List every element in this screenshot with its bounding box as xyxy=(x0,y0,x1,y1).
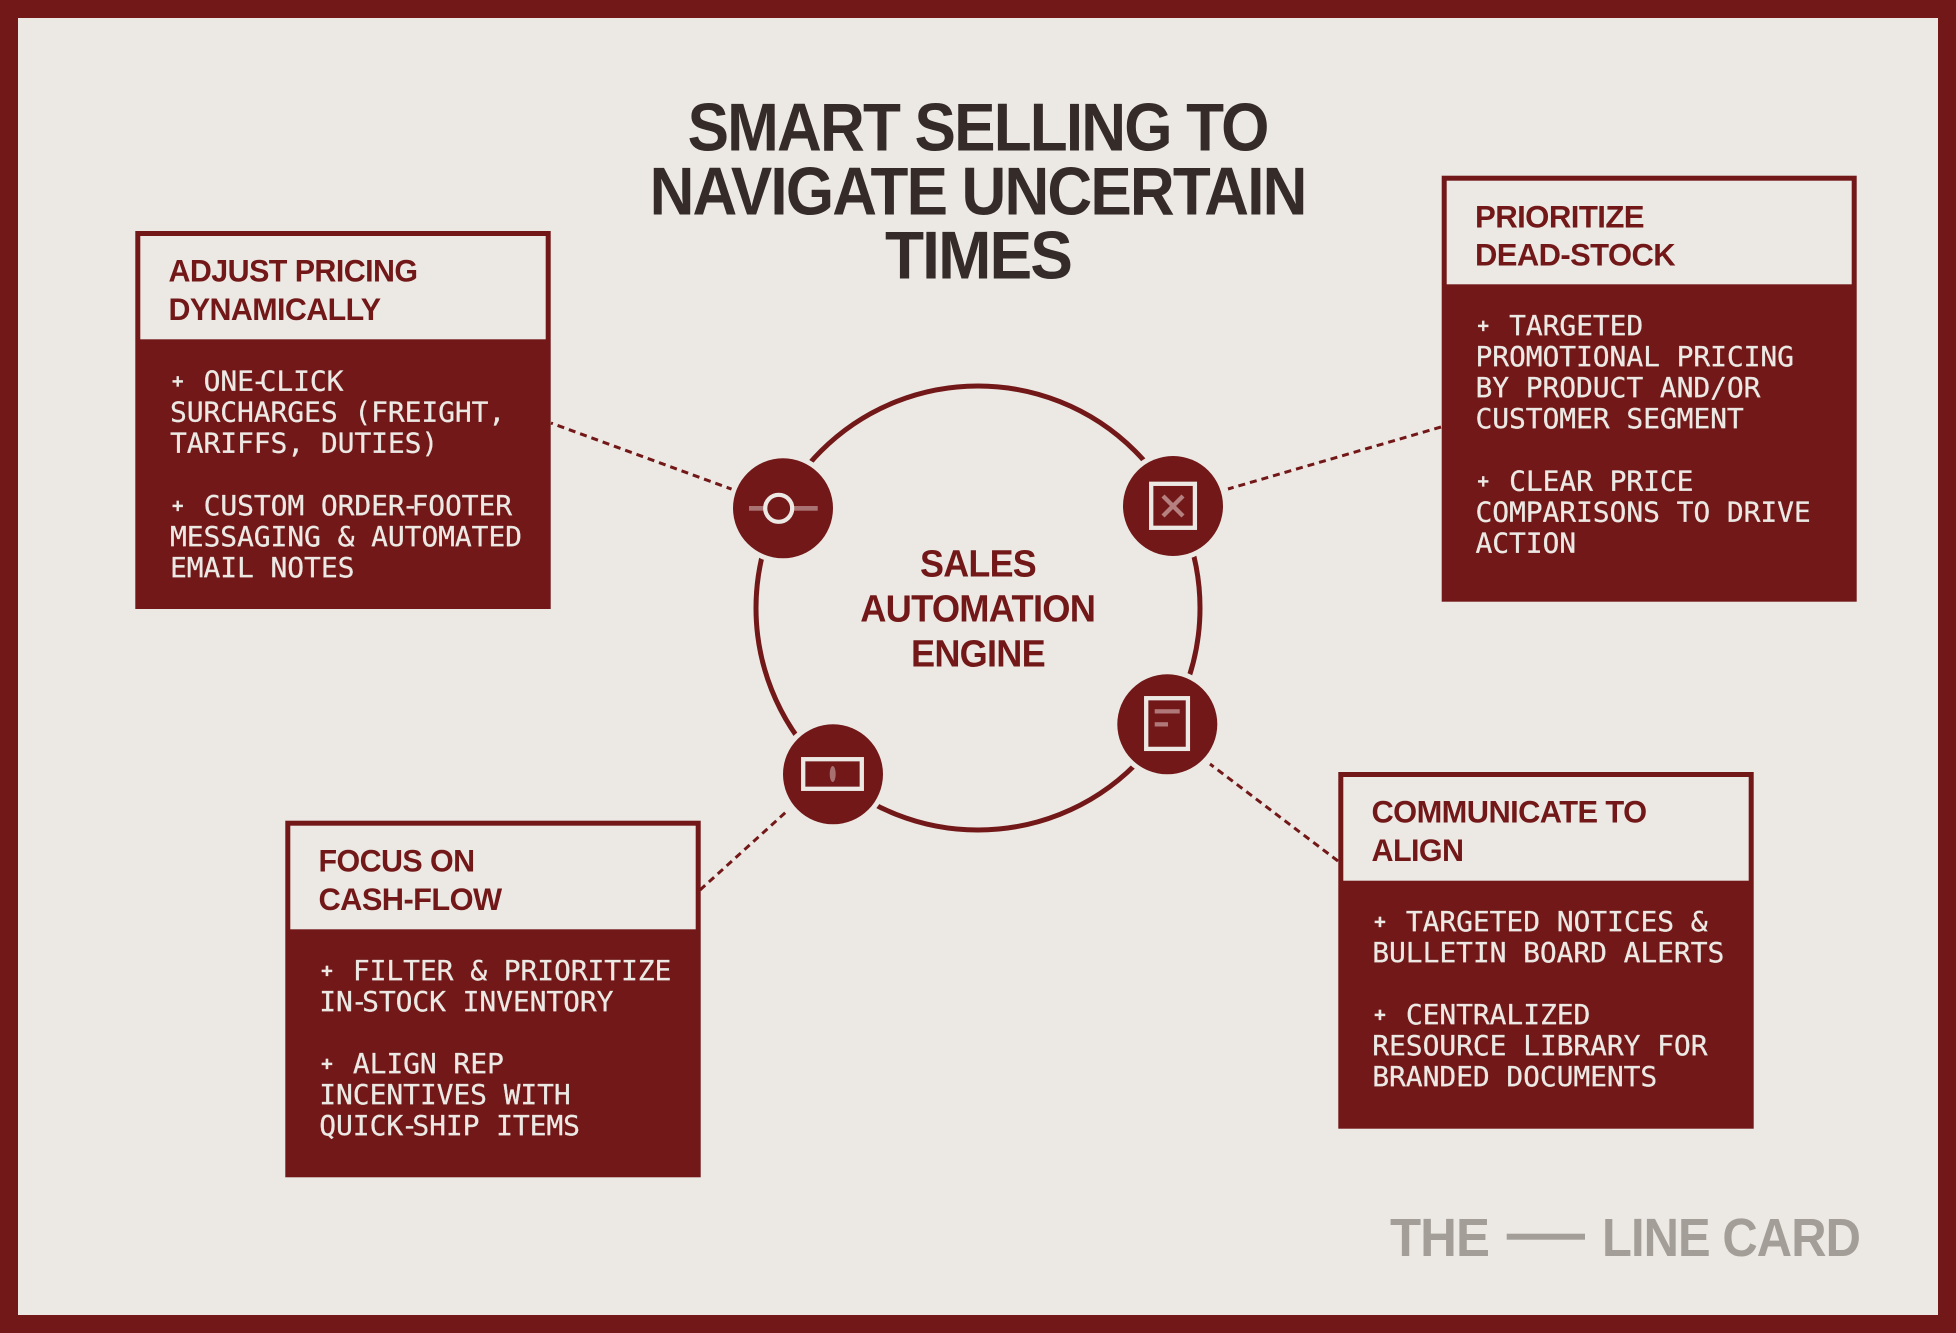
heading: focus on cash-flow: CASH-FLOW xyxy=(318,881,502,917)
list: cash-flow points: IN-STOCK INVENTORY xyxy=(319,985,614,1018)
icon: pricing slider xyxy=(728,453,838,563)
heading: communicate to align xyxy=(1372,794,1647,868)
list: pricing points: ONE-CLICK xyxy=(204,364,343,398)
list: dead-stock points: + xyxy=(1478,315,1489,337)
list: communication points: CENTRALIZED xyxy=(1406,998,1590,1031)
list: dead-stock points: CUSTOMER SEGMENT xyxy=(1476,402,1744,435)
list: cash-flow points: ALIGN REP xyxy=(353,1047,504,1080)
list: pricing points: MESSAGING & AUTOMATED xyxy=(170,520,522,553)
list: communication points: BULLETIN BOARD ALERTS xyxy=(1372,936,1724,969)
list: cash-flow points xyxy=(319,954,671,1142)
center label: sales automation engine: ENGINE xyxy=(911,634,1045,676)
connector: communicate panel to document icon xyxy=(1210,764,1338,861)
connector: pricing panel to pricing icon xyxy=(551,423,734,490)
list: dead-stock points: PROMOTIONAL PRICING xyxy=(1476,340,1794,373)
heading: adjust pricing xyxy=(168,253,418,327)
heading: prioritize dead-stock: DEAD-STOCK xyxy=(1475,236,1676,272)
heading: adjust pricing: ADJUST PRICING xyxy=(168,253,418,289)
list: communication points: + xyxy=(1374,911,1386,933)
icon: document xyxy=(1112,669,1222,779)
title xyxy=(650,90,1306,293)
list: dead-stock points xyxy=(1476,309,1811,560)
title: NAVIGATE UNCERTAIN xyxy=(650,154,1306,230)
list: cash-flow points: + xyxy=(321,1053,333,1075)
list: pricing points xyxy=(170,364,522,584)
list: communication points: + xyxy=(1374,1004,1386,1026)
list: cash-flow points: INCENTIVES WITH xyxy=(319,1078,571,1111)
logo: the line card xyxy=(1390,1208,1860,1268)
heading: focus on cash-flow xyxy=(318,843,502,917)
list: dead-stock points: BY PRODUCT AND/OR xyxy=(1476,371,1761,404)
icon: crossed box xyxy=(1118,451,1228,561)
list: communication points: RESOURCE LIBRARY FOR xyxy=(1372,1029,1708,1062)
panel: prioritize dead-stock xyxy=(1442,176,1857,602)
central engine ring xyxy=(756,386,1200,830)
heading: prioritize dead-stock: PRIORITIZE xyxy=(1475,199,1644,235)
list: dead-stock points: + xyxy=(1478,470,1489,492)
logo: the line card: THE xyxy=(1390,1208,1489,1268)
icon: banknote xyxy=(778,719,888,829)
heading: focus on cash-flow: FOCUS ON xyxy=(318,843,474,879)
panel: focus on cash-flow xyxy=(285,821,701,1177)
list: pricing points: CUSTOM ORDER-FOOTER xyxy=(204,489,512,522)
list: pricing points: SURCHARGES (FREIGHT, xyxy=(170,396,505,428)
list: pricing points: + xyxy=(172,495,183,517)
list: cash-flow points: FILTER & PRIORITIZE xyxy=(353,954,671,987)
list: pricing points: TARIFFS, DUTIES) xyxy=(170,426,438,460)
heading: communicate to align: COMMUNICATE TO xyxy=(1372,794,1647,830)
logo: the line card: LINE CARD xyxy=(1602,1208,1860,1268)
list: dead-stock points: COMPARISONS TO DRIVE xyxy=(1476,496,1811,528)
list: communication points xyxy=(1372,905,1724,1093)
heading: adjust pricing: DYNAMICALLY xyxy=(168,291,381,327)
list: communication points: BRANDED DOCUMENTS xyxy=(1372,1060,1657,1093)
title: TIMES xyxy=(885,217,1071,293)
list: dead-stock points: ACTION xyxy=(1476,526,1576,560)
list: pricing points: + xyxy=(172,370,183,392)
list: dead-stock points: TARGETED xyxy=(1509,309,1643,342)
connector: cash-flow panel to cash icon xyxy=(700,812,786,890)
list: dead-stock points: CLEAR PRICE xyxy=(1509,464,1693,498)
panel: adjust pricing dynamically xyxy=(135,231,551,609)
list: pricing points: EMAIL NOTES xyxy=(170,551,354,584)
list: communication points: TARGETED NOTICES & xyxy=(1406,905,1708,938)
center label: sales automation engine xyxy=(860,544,1095,676)
panel: communicate to align xyxy=(1338,772,1754,1129)
connector: dead-stock panel to dead-stock icon xyxy=(1228,427,1441,489)
list: cash-flow points: + xyxy=(321,960,333,982)
title: SMART SELLING TO xyxy=(688,90,1268,166)
center label: sales automation engine: SALES xyxy=(920,544,1036,586)
list: cash-flow points: QUICK-SHIP ITEMS xyxy=(319,1109,580,1142)
heading: prioritize dead-stock xyxy=(1475,199,1676,272)
center label: sales automation engine: AUTOMATION xyxy=(860,589,1095,631)
heading: communicate to align: ALIGN xyxy=(1372,832,1464,868)
